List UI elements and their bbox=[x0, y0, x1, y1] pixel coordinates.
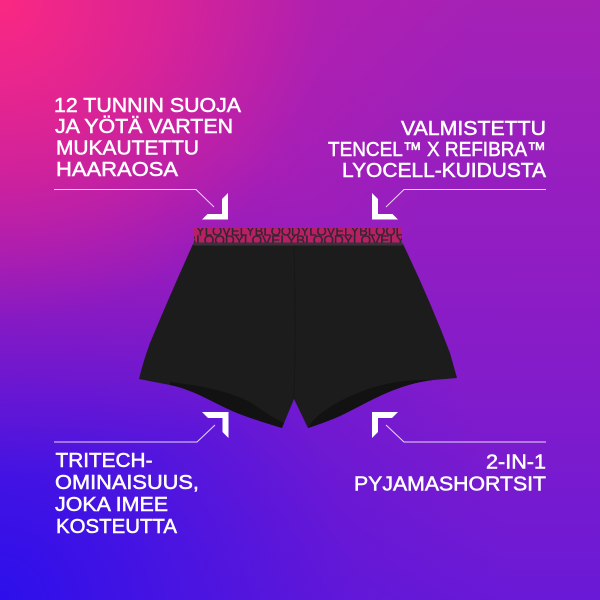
callout: bottom left text: OMINAISUUS, bbox=[55, 472, 199, 494]
shorts product image bbox=[139, 224, 457, 428]
callout: bottom right text: PYJAMASHORTSIT bbox=[354, 474, 546, 496]
callout: bottom right text bbox=[354, 452, 546, 496]
callout: top left text: MUKAUTETTU bbox=[56, 138, 199, 160]
waistband: BLOODYLOVELYBLOODYLOVELY bbox=[187, 234, 406, 248]
waistband bbox=[194, 228, 402, 246]
callout: top right text bbox=[328, 118, 547, 182]
arrow: top left bbox=[54, 190, 228, 220]
infographic canvas bbox=[54, 98, 546, 534]
callout: top right text: VALMISTETTU bbox=[401, 118, 546, 140]
callout: top right text: LYOCELL-KUIDUSTA bbox=[342, 160, 547, 182]
callout: top left text bbox=[54, 95, 242, 181]
shorts body bbox=[139, 244, 457, 428]
center seam bbox=[294, 245, 295, 399]
arrow: bottom left bbox=[54, 412, 228, 442]
callout: bottom right text: 2-IN-1 bbox=[486, 452, 546, 474]
arrow: top right bbox=[372, 190, 546, 220]
callout: bottom left text: JOKA IMEE bbox=[55, 494, 168, 516]
callout: top left text: 12 TUNNIN SUOJA bbox=[54, 95, 242, 117]
callout: bottom left text bbox=[55, 450, 199, 538]
waistband: YLOVELYBLOODYLOVELYBLOOD bbox=[196, 224, 405, 238]
callout: bottom left text: TRITECH- bbox=[56, 450, 152, 472]
callout: top right text: TENCEL™ X REFIBRA™ bbox=[328, 139, 546, 161]
callout: top left text: HAARAOSA bbox=[56, 159, 179, 181]
callout: bottom left text: KOSTEUTTA bbox=[56, 516, 178, 538]
callout: top left text: JA YÖTÄ VARTEN bbox=[55, 116, 233, 138]
hem shading bbox=[170, 380, 433, 428]
arrow: bottom right bbox=[372, 412, 546, 442]
